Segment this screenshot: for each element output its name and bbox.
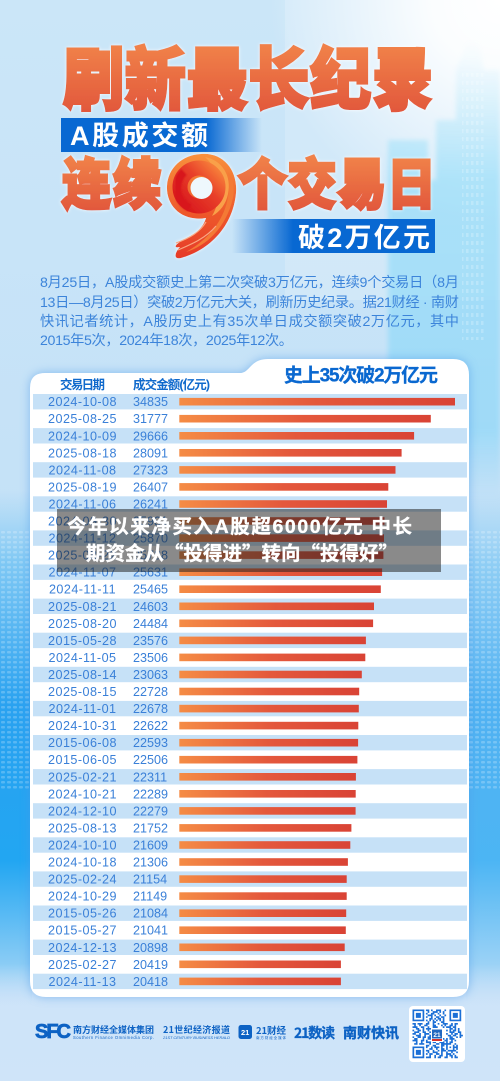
rows: 2024-10-09 [48, 429, 117, 443]
headline overlay: 今年以来净买入A股超6000亿元 中长 [67, 515, 412, 538]
panel: record table card [30, 359, 469, 997]
rows: 31777 [133, 412, 168, 426]
logo: 21财经: 南方财经全媒体 [256, 1035, 286, 1040]
intro paragraph: 2015年5次，2024年18次，2025年12次。 [40, 333, 293, 349]
footer logos [35, 1006, 465, 1062]
rows: 2024-11-07 [48, 566, 116, 580]
rows: 22279 [133, 804, 168, 818]
rows: 2024-10-18 [48, 856, 117, 870]
rows: 2024-10-29 [48, 890, 117, 904]
banner: 破2万亿元 [232, 219, 435, 253]
title line: 连续 个交易日: 个交易日 [238, 141, 436, 220]
rows: 2025-02-24 [48, 873, 117, 887]
logo: 21财经 [238, 1023, 286, 1040]
rows: 2025-08-20 [48, 617, 117, 631]
rows: 2025-02-21 [48, 770, 117, 784]
rows: 34835 [133, 395, 168, 409]
title line: 刷新最长纪录: 刷新最长纪录 [63, 25, 433, 124]
rows: 21609 [133, 838, 168, 852]
big number 9 [167, 154, 236, 258]
column headers: 交易日期 [60, 377, 105, 392]
intro paragraph: 8月25日，A股成交额史上第二次突破3万亿元，连续9个交易日（8月 [40, 274, 459, 291]
column headers [60, 377, 210, 392]
rows: 21306 [133, 856, 168, 870]
rows: 2025-08-15 [48, 685, 117, 699]
rows: 2025-08-19 [48, 480, 117, 494]
rows: 20419 [133, 958, 168, 972]
logo: 21数读: 21数读 [294, 1023, 335, 1043]
rows: 25631 [133, 566, 168, 580]
rows: 21154 [133, 873, 167, 887]
rows: 2024-12-10 [48, 804, 117, 818]
rows: 2025-08-18 [48, 446, 117, 460]
title line: 连续 个交易日 [62, 141, 436, 220]
rows: 21752 [133, 821, 168, 835]
rows: 2015-05-28 [48, 634, 117, 648]
banner: A股成交额 [61, 118, 262, 152]
rows: 2024-11-12 [48, 532, 116, 546]
rows: 25931 [133, 514, 168, 528]
banner: A股成交额: A股成交额 [70, 121, 208, 151]
column headers: 成交金额(亿元) [133, 377, 210, 392]
table heading: 史上35次破2万亿元 [284, 364, 438, 386]
banner: 破2万亿元: 破2万亿元 [298, 223, 430, 253]
rows: 2024-10-31 [48, 719, 117, 733]
rows: 2024-11-08 [48, 463, 116, 477]
rows: 2015-06-05 [48, 753, 117, 767]
rows: 24603 [133, 600, 168, 614]
rows: 22289 [133, 787, 168, 801]
title line: 连续 个交易日: 连续 [62, 141, 162, 220]
rows: 2025-08-25 [48, 412, 117, 426]
rows: 25870 [133, 532, 168, 546]
rows: 22506 [133, 753, 168, 767]
intro paragraph: 快讯记者统计，A股历史上有35次单日成交额突破2万亿元，其中 [40, 313, 459, 330]
rows: 26241 [133, 498, 168, 512]
background building [388, 40, 500, 500]
rows: 2024-11-06 [48, 498, 116, 512]
rows: 22678 [133, 702, 168, 716]
logo: 21世纪经济报道: 21世纪经济报道 [163, 1023, 230, 1036]
rows: 2025-08-13 [48, 821, 117, 835]
rows: 29666 [133, 429, 168, 443]
rows: 26407 [133, 480, 168, 494]
rows: 24484 [133, 617, 168, 631]
rows [33, 394, 467, 989]
QR code [409, 1006, 465, 1062]
rows: 2015-05-26 [48, 907, 117, 921]
rows: 2024-11-01 [48, 702, 116, 716]
logo: SFC: Southern Finance Omnimedia Corp. [73, 1035, 154, 1040]
QR centre badge: 21 [433, 1032, 441, 1039]
rows: 23576 [133, 634, 168, 648]
logo: SFC: 南方财经全媒体集团 [73, 1023, 154, 1036]
rows: 23506 [133, 651, 168, 665]
logo: SFC: SFC [35, 1021, 71, 1043]
rows: 21041 [133, 924, 168, 938]
rows: 2024-12-13 [48, 941, 117, 955]
rows: 2024-11-05 [48, 651, 116, 665]
logo: 21财经: 21 [241, 1028, 249, 1037]
intro paragraph [40, 274, 459, 349]
logo: SFC [35, 1021, 154, 1043]
rows: 2024-10-21 [48, 787, 117, 801]
rows: 22622 [133, 719, 168, 733]
rows: 27323 [133, 463, 168, 477]
rows: 2025-02-27 [48, 958, 117, 972]
rows: 20418 [133, 975, 168, 989]
rows: 22311 [133, 770, 167, 784]
rows: 2015-05-27 [48, 924, 117, 938]
rows: 2024-11-13 [48, 975, 116, 989]
logo: 21世纪经济报道: 21ST CENTURY BUSINESS HERALD [162, 1035, 230, 1040]
rows: 2015-06-08 [48, 736, 117, 750]
rows: 25465 [133, 583, 168, 597]
rows: 20898 [133, 941, 168, 955]
intro paragraph: 13日—8月25日）突破2万亿元大关，刷新历史纪录。据21财经 · 南财 [40, 295, 459, 311]
rows: 2025-08-21 [48, 600, 117, 614]
rows: 2025-08-22 [48, 549, 117, 563]
rows: 2024-09-30 [48, 514, 117, 528]
rows: 21084 [133, 907, 168, 921]
rows: 2024-10-10 [48, 838, 117, 852]
rows: 2024-10-08 [48, 395, 117, 409]
rows: 21149 [133, 890, 167, 904]
rows: 22593 [133, 736, 168, 750]
logo: 南财快讯: 南财快讯 [343, 1023, 399, 1043]
headline overlay: 期资金从“投得进”转向“投得好” [86, 537, 398, 566]
logo: 21财经: 21财经 [256, 1023, 286, 1037]
rows: 2025-08-14 [48, 668, 117, 682]
rows: 23063 [133, 668, 168, 682]
rows: 28091 [133, 446, 168, 460]
rows: 2024-11-11 [49, 583, 116, 597]
rows: 22728 [133, 685, 168, 699]
headline overlay [57, 509, 441, 572]
rows: 25788 [133, 549, 168, 563]
